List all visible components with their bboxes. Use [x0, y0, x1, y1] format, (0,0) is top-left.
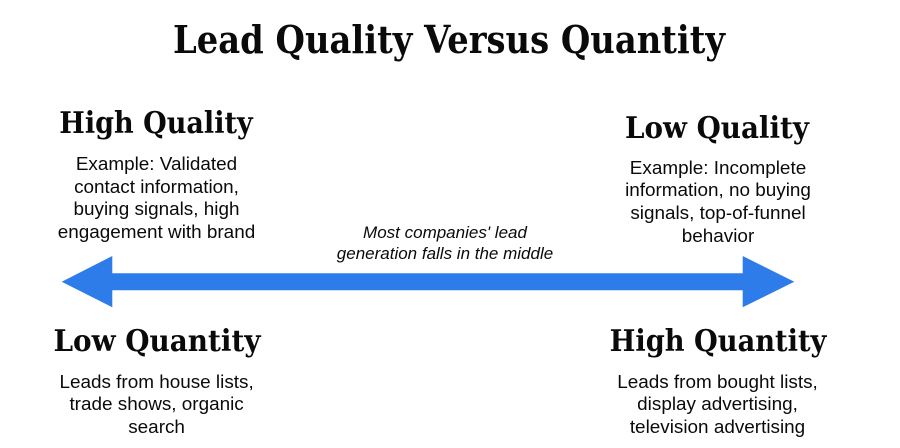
title: Lead Quality Versus Quantity — [173, 17, 725, 62]
text: low quantity example — [59, 372, 254, 438]
callout: middle note — [336, 223, 553, 263]
text: high quantity example: Leads from bought lists, — [617, 372, 818, 393]
text: high quantity example: display advertising, — [637, 394, 798, 415]
text: low quantity example: Leads from house lists, — [59, 372, 254, 393]
text: low quality example: behavior — [682, 226, 754, 247]
text: low quantity example: search — [128, 417, 185, 438]
text: high quality example: contact information, — [74, 177, 239, 198]
text: low quality example: information, no buying — [625, 180, 811, 201]
text: high quantity example: television advertising — [630, 417, 805, 438]
text: high quality example: buying signals, high — [74, 199, 239, 220]
heading: low quality: Low Quality — [625, 111, 809, 146]
text: low quantity example: trade shows, organic — [69, 394, 244, 415]
text: low quality example: signals, top-of-funnel — [630, 203, 806, 224]
heading: high quality: High Quality — [59, 106, 253, 141]
callout: middle note: generation falls in the middle — [337, 244, 553, 263]
text: low quality example — [625, 158, 811, 247]
text: low quality example: Example: Incomplete — [630, 158, 806, 179]
heading: high quantity: High Quantity — [609, 324, 826, 359]
callout: middle note: Most companies' lead — [363, 223, 527, 242]
arrow: double-headed spectrum — [62, 256, 794, 308]
text: high quality example: Example: Validated — [76, 154, 237, 175]
text: high quantity example — [617, 372, 818, 438]
text: high quality example — [58, 154, 255, 243]
text: high quality example: engagement with brand — [58, 222, 255, 243]
heading: low quantity: Low Quantity — [53, 324, 260, 359]
